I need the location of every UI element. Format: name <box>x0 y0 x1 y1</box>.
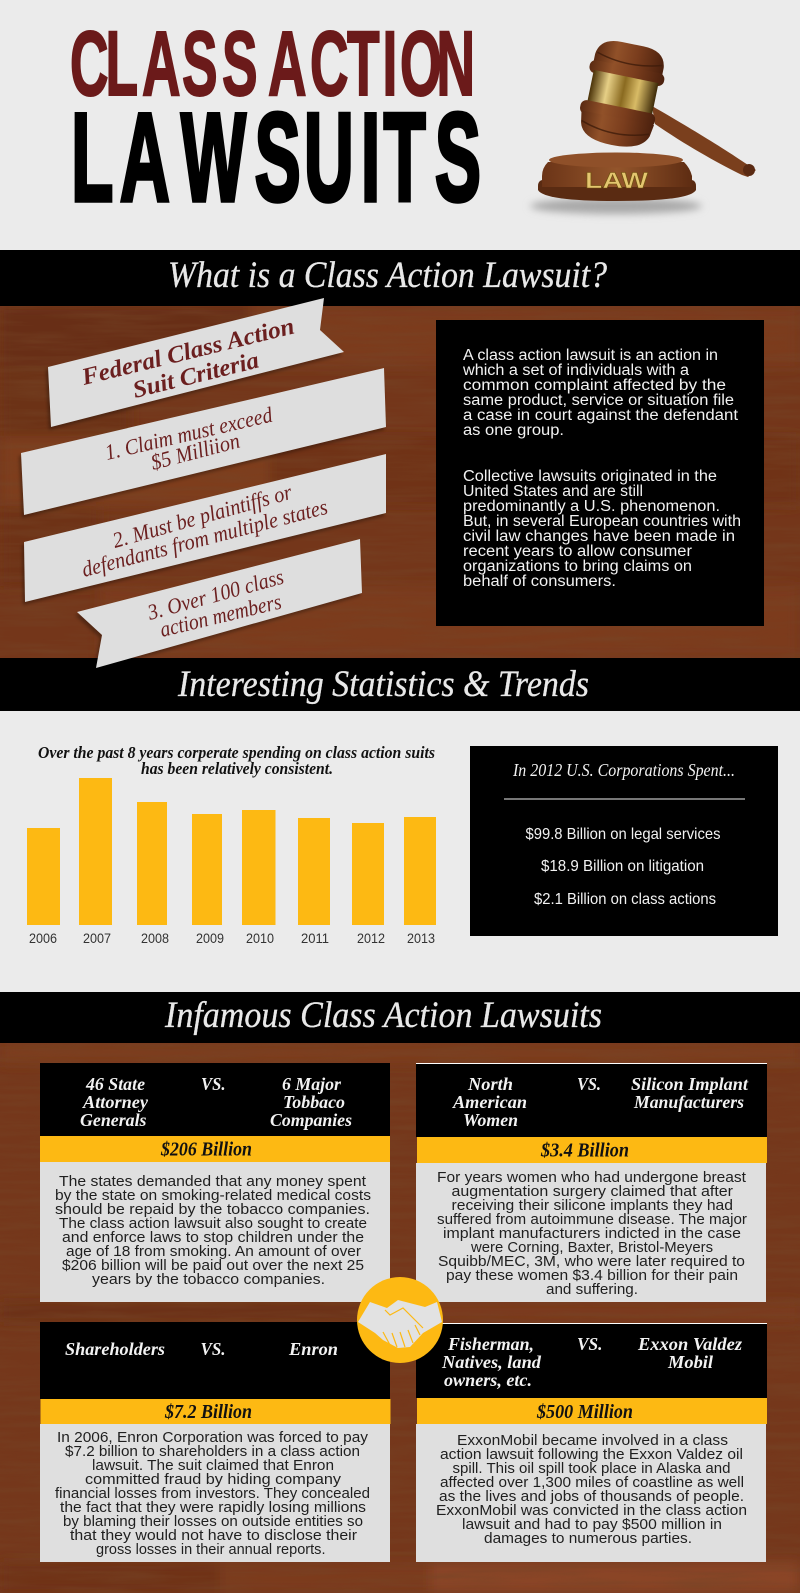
amount: $3.4 Billion: $3.4 Billion <box>540 1140 629 1162</box>
parties: tobacco <box>80 1074 352 1130</box>
text: definition paragraph 2 <box>463 468 741 590</box>
panel: federal criteria ribbons <box>19 298 386 671</box>
title: LAWSUITS <box>71 89 481 228</box>
text: tobacco description: by the state on smoking-related medical costs <box>55 1188 371 1204</box>
text: tobacco description: should be repaid by the tobacco companies. <box>55 1202 370 1218</box>
parties: implants: Manufacturers <box>633 1092 744 1112</box>
parties: Exxon: VS. <box>577 1334 602 1354</box>
parties: implants <box>452 1074 749 1130</box>
text: definition paragraph 1: same product, service or situation file <box>463 392 734 409</box>
text: Enron description: In 2006, Enron Corporation was forced to pay <box>57 1430 369 1446</box>
text: definition paragraph 2: behalf of consumers. <box>463 573 616 590</box>
panel: wood background top <box>0 306 800 658</box>
text: implant description: For years women who had undergone breast <box>437 1170 746 1186</box>
panel: 2012 spending: $2.1 Billion on class actions <box>534 891 716 908</box>
gavel head <box>574 36 670 153</box>
bar chart: 2008 <box>141 930 169 946</box>
bar chart <box>27 778 436 946</box>
bar chart: 2012 <box>357 930 385 946</box>
text: definition paragraph 1: common complaint affected by the <box>463 377 726 394</box>
ribbon: criterion 1 <box>21 368 386 515</box>
text: implant description: pay these women $3.4 billion for their pain <box>446 1268 738 1284</box>
text: implant description: suffered from autoimmune disease. The major <box>437 1212 747 1228</box>
ribbon: criterion 2 <box>24 454 386 602</box>
ribbon: criterion 2: 2. Must be plaintiffs or <box>110 479 295 553</box>
ribbon: criterion 3: 3. Over 100 class <box>144 564 286 625</box>
text: Enron description: gross losses in their annual reports. <box>96 1542 326 1558</box>
text: tobacco description <box>55 1174 371 1288</box>
text: Enron description: $7.2 billion to shareholders in a class action <box>65 1444 360 1460</box>
text: Enron description: financial losses from investors. They concealed <box>55 1486 370 1502</box>
text: tobacco description: The class action lawsuit also sought to create <box>59 1216 367 1232</box>
text: definition paragraph 2: But, in several European countries with <box>463 513 741 530</box>
panel: definition box <box>436 320 764 626</box>
text: tobacco description: and enforce laws to stop children under the <box>62 1230 364 1246</box>
ribbon: heading: Suit Criteria <box>130 348 262 404</box>
parties: Enron <box>65 1339 338 1359</box>
parties: Exxon <box>441 1334 742 1390</box>
panel: 2012 spending: In 2012 U.S. Corporations Spent... <box>512 760 735 780</box>
text: Exxon description: lawsuit and had to pay $500 million in <box>462 1517 722 1533</box>
chart heading <box>38 743 435 778</box>
amount: $206 Billion: $206 Billion <box>160 1138 252 1160</box>
parties: implants: VS. <box>577 1074 601 1094</box>
text: definition paragraph 2: organizations to bring claims on <box>463 558 692 575</box>
parties: tobacco: Attorney <box>82 1092 149 1112</box>
text: Enron description <box>55 1430 370 1558</box>
ribbon: criterion 2: defendants from multiple states <box>79 494 330 582</box>
bar chart: 2009 <box>196 930 224 946</box>
text: definition paragraph 2: United States and are still <box>463 483 643 500</box>
text: tobacco description: The states demanded that any money spent <box>59 1174 366 1190</box>
text: implant description: and suffering. <box>546 1282 638 1298</box>
parties: tobacco: 46 State <box>85 1074 145 1094</box>
text: definition paragraph 1: A class action lawsuit is an action in <box>463 347 718 364</box>
parties: Exxon: Exxon Valdez <box>637 1334 742 1354</box>
text: Exxon description: spill. This oil spill took place in Alaska and <box>452 1461 730 1477</box>
text: implant description: receiving their silicone implants they had <box>452 1198 733 1214</box>
text: definition paragraph 1: as one group. <box>463 422 564 439</box>
parties: Exxon: Fisherman, <box>447 1334 534 1354</box>
panel: implant case <box>416 1063 767 1302</box>
text: Enron description: lawsuit. The suit claimed that Enron <box>92 1458 334 1474</box>
parties: implants: Silicon Implant <box>631 1074 749 1094</box>
text: Enron description: the fact that they were rapidly losing millions <box>60 1500 366 1516</box>
ribbon: heading <box>48 298 344 427</box>
parties: implants: Women <box>463 1110 518 1130</box>
text: Exxon description <box>436 1433 747 1547</box>
ribbon: criterion 1: $5 Milliion <box>148 428 242 475</box>
parties: Exxon: owners, etc. <box>444 1370 532 1390</box>
section band: Interesting Statistics & Trends <box>0 658 800 711</box>
bar chart: 2006 <box>29 930 57 946</box>
section band: Infamous Class Action Lawsuits: Infamous Class Action Lawsuits <box>164 995 602 1036</box>
section band: Interesting Statistics & Trends: Interesting Statistics & Trends <box>177 664 589 705</box>
text: Exxon description: action lawsuit following the Exxon Valdez oil <box>440 1447 743 1463</box>
text: definition paragraph 1: which a set of individuals with a <box>462 362 689 379</box>
text: definition paragraph 2: predominantly a U.S. phenomenon. <box>463 498 720 515</box>
text: definition paragraph 2: recent years to allow consumer <box>463 543 692 560</box>
parties: tobacco: 6 Major <box>282 1074 342 1094</box>
panel: tobacco case <box>40 1063 390 1302</box>
title: CLASS ACTION <box>70 12 475 115</box>
text: implant description: Squibb/MEC, 3M, who were later required to <box>438 1254 745 1270</box>
text: definition paragraph 2: civil law changes have been made in <box>463 528 735 545</box>
text: Exxon description: affected over 1,300 miles of coastline as well <box>440 1475 744 1491</box>
panel: 2012 spending <box>470 746 778 936</box>
icon: handshake <box>357 1277 443 1363</box>
chart heading: Over the past 8 years corperate spending on class action suits <box>38 743 435 762</box>
amount: $7.2 Billion: $7.2 Billion <box>164 1401 252 1423</box>
text: implant description: were Corning, Baxter, Bristol-Meyers <box>470 1240 713 1256</box>
parties: Enron: Shareholders <box>65 1339 165 1359</box>
section band: Infamous Class Action Lawsuits <box>0 992 800 1043</box>
bar chart: 2011 <box>301 930 329 946</box>
parties: tobacco: VS. <box>201 1074 226 1094</box>
text: definition paragraph 1 <box>462 347 739 439</box>
text: tobacco description: years by the tobacco companies. <box>92 1272 325 1288</box>
text: Exxon description: as the lives and jobs of thousands of people. <box>439 1489 744 1505</box>
parties: Exxon: Natives, land <box>441 1352 542 1372</box>
ribbon: criterion 3: action members <box>157 589 284 642</box>
panel: Exxon case <box>416 1323 767 1562</box>
text: Exxon description: damages to numerous parties. <box>484 1531 692 1547</box>
parties: tobacco: Generals <box>80 1110 146 1130</box>
section band: What is a Class Action Lawsuit?: What is a Class Action Lawsuit? <box>168 255 607 296</box>
parties: tobacco: Companies <box>270 1110 352 1130</box>
parties: implants: North <box>467 1074 513 1094</box>
parties: Enron: Enron <box>288 1339 338 1359</box>
title <box>70 12 481 228</box>
text: Enron description: by blaming their losses on outside entities so <box>63 1514 363 1530</box>
text: definition paragraph 1: a case in court against the defendant <box>463 407 739 424</box>
text: implant description: implant manufacturers indicted in the case <box>443 1226 741 1242</box>
parties: Enron: VS. <box>200 1339 226 1359</box>
text: implant description: augmentation surgery claimed that after <box>452 1184 733 1200</box>
text: tobacco description: $206 billion will be paid out over the next 25 <box>62 1258 364 1274</box>
section band: What is a Class Action Lawsuit? <box>0 250 800 306</box>
panel: Enron case <box>40 1322 390 1562</box>
bar chart: 2010 <box>246 930 274 946</box>
text: Enron description: committed fraud by hiding company <box>85 1472 342 1488</box>
amount: $500 Million: $500 Million <box>536 1401 633 1423</box>
bar chart: 2013 <box>407 930 435 946</box>
text: Exxon description: ExxonMobil was convicted in the class action <box>436 1503 747 1519</box>
text: tobacco description: age of 18 from smoking. An amount of over <box>66 1244 361 1260</box>
text: Enron description: that they would not have to disclose their <box>70 1528 357 1544</box>
parties: Exxon: Mobil <box>667 1352 713 1372</box>
text: definition paragraph 2: Collective lawsuits originated in the <box>463 468 717 485</box>
parties: tobacco: Tobbaco <box>283 1092 345 1112</box>
ribbon: heading: Federal Class Action <box>78 314 297 391</box>
ribbon: criterion 3 <box>77 539 362 668</box>
parties: implants: American <box>452 1092 527 1112</box>
icon: gavel <box>530 36 756 214</box>
panel: 2012 spending: $18.9 Billion on litigation <box>541 858 704 875</box>
text: implant description <box>437 1170 747 1298</box>
ribbon: criterion 1: 1. Claim must exceed <box>102 402 276 465</box>
bar chart: 2007 <box>83 930 111 946</box>
panel: wood background bottom <box>0 1043 800 1593</box>
icon: gavel: LAW <box>585 168 648 193</box>
text: Exxon description: ExxonMobil became involved in a class <box>457 1433 728 1449</box>
chart heading: has been relatively consistent. <box>141 759 333 778</box>
panel: 2012 spending: $99.8 Billion on legal services <box>526 826 720 843</box>
